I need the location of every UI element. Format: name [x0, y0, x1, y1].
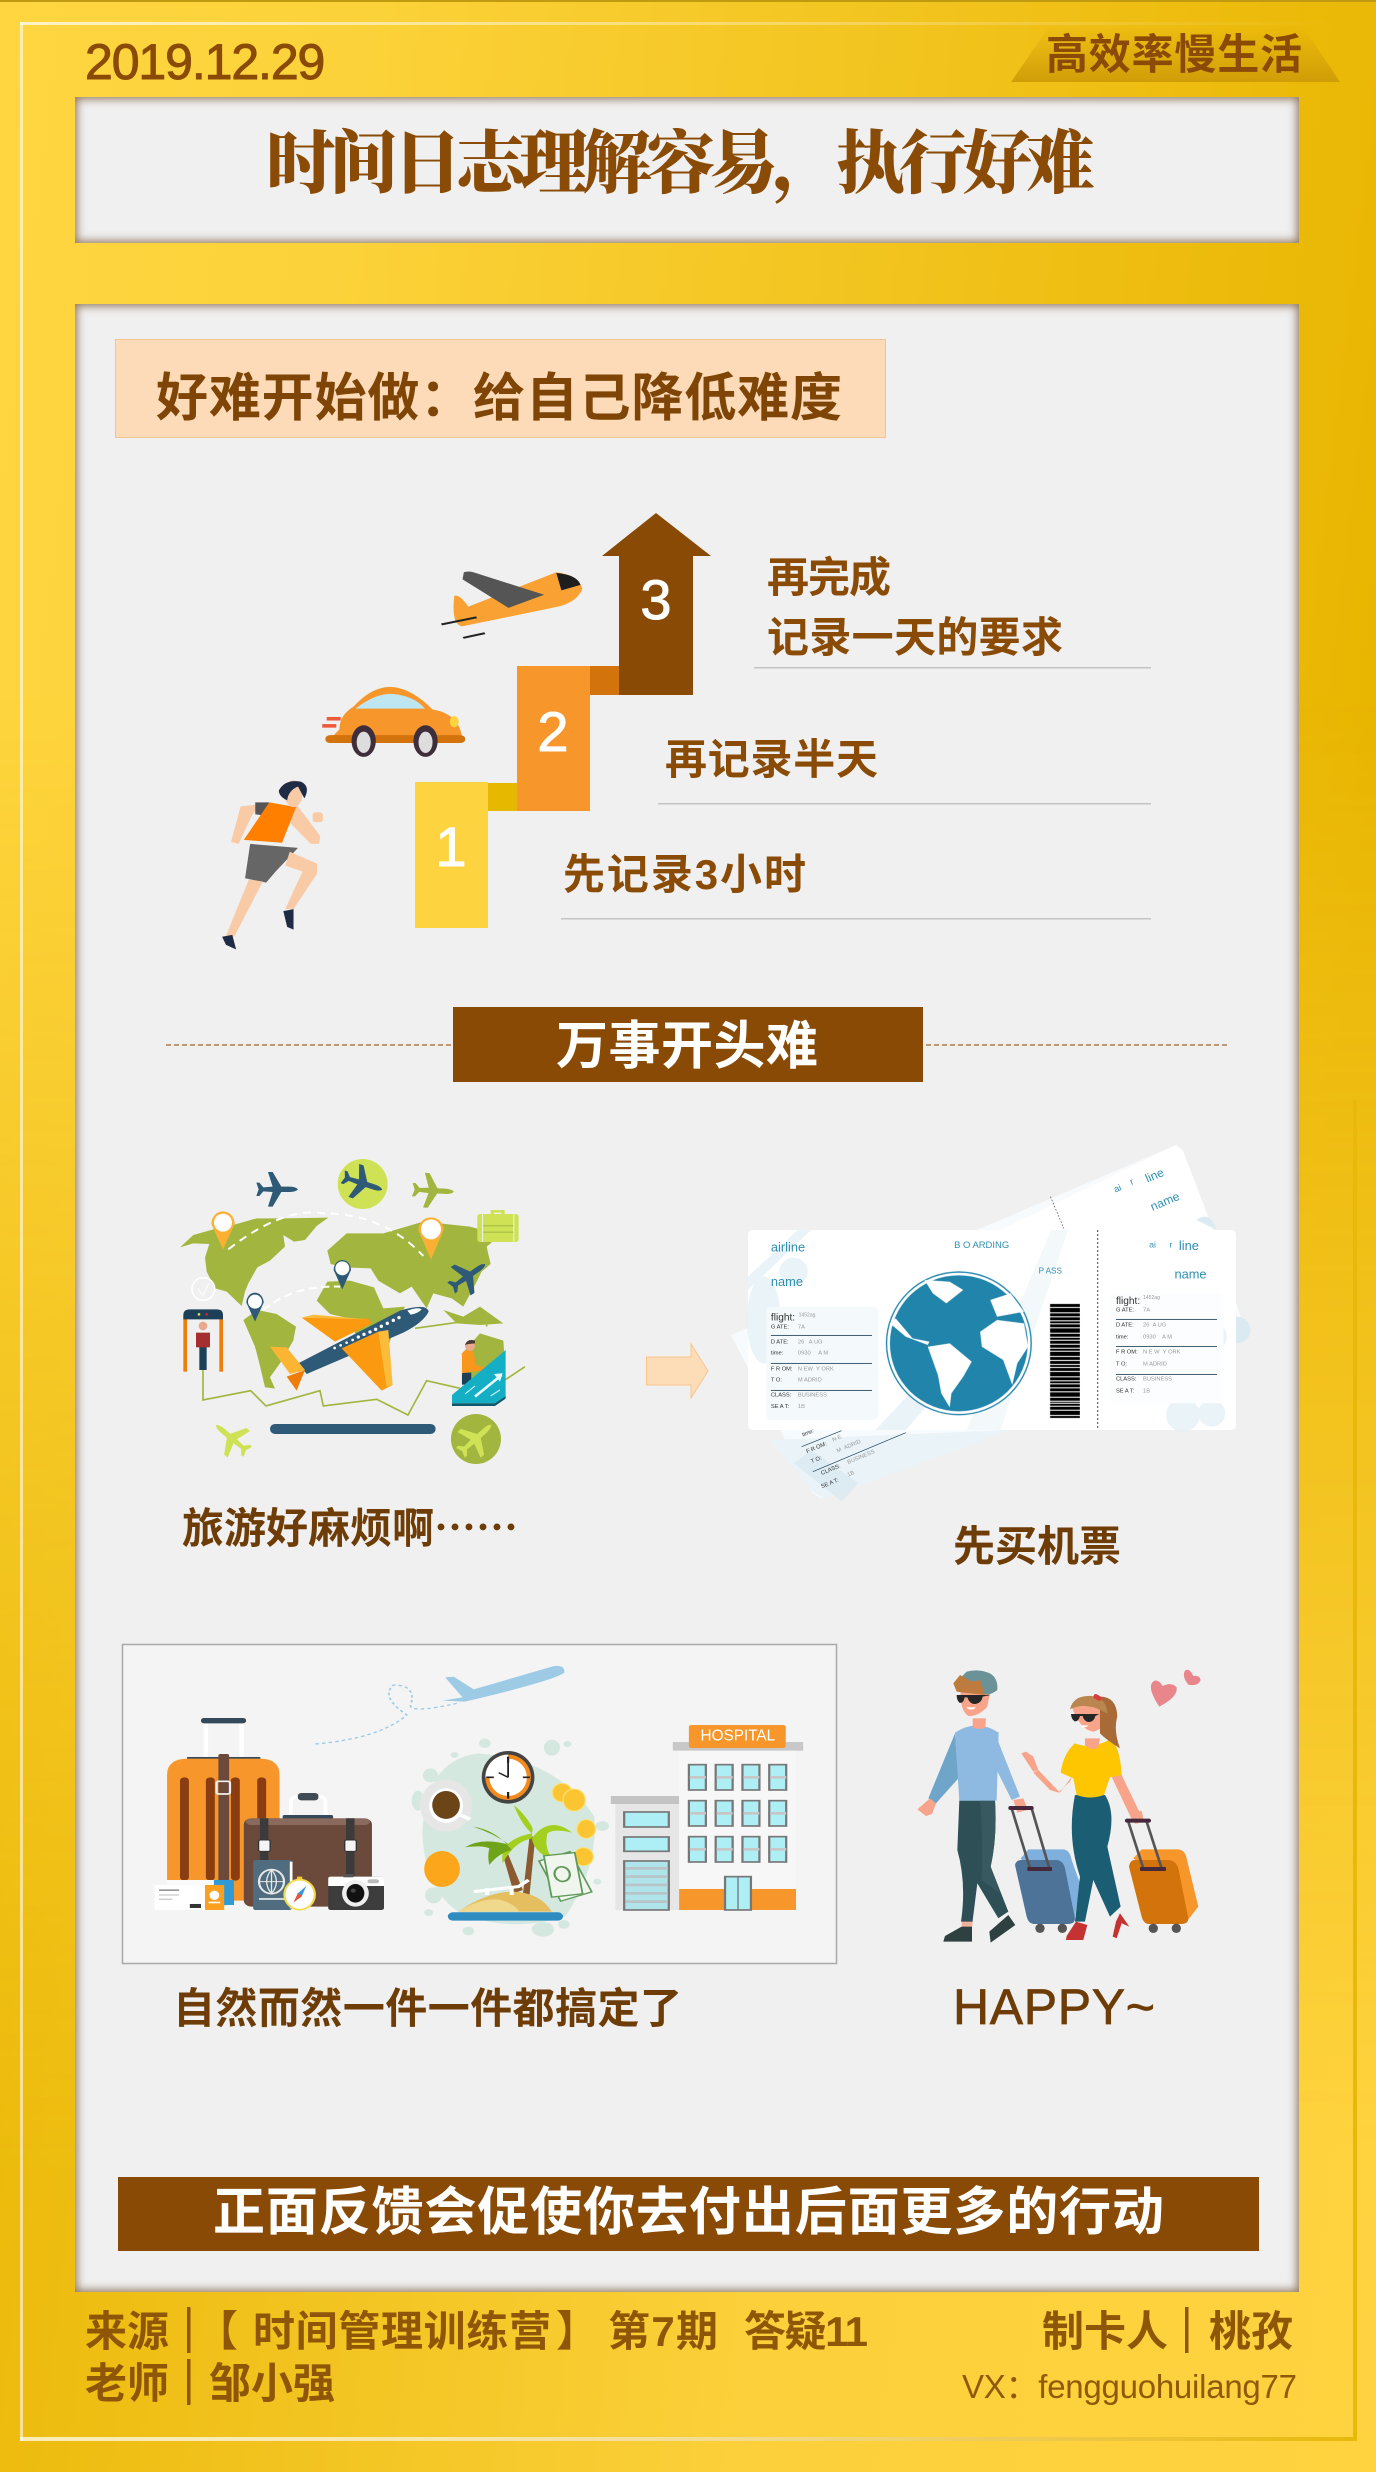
globe — [886, 1272, 1031, 1415]
divider banner: 万事开头难 — [556, 1018, 818, 1076]
illustration: boarding passes — [731, 1145, 1251, 1502]
ticket text left: P ASS — [1039, 1267, 1062, 1276]
ticket text lower rear: SE A T: — [820, 1477, 840, 1490]
big airplane — [270, 1307, 429, 1391]
footer: wechat id: VX：fengguohuilang77 — [962, 2368, 1297, 2405]
small planes and badges — [256, 1172, 298, 1207]
ticket text right stub: 26 A UG — [1143, 1322, 1166, 1328]
footer: card maker — [1042, 2307, 1293, 2355]
ticket text right stub: 1B — [1143, 1388, 1150, 1394]
ticket text lower rear: F R OM: — [805, 1441, 828, 1455]
ticket text left: flight: — [771, 1313, 795, 1324]
illustration: world map travel — [180, 1159, 525, 1466]
footer: teacher: 老师 — [85, 2360, 169, 2407]
zigzag route — [203, 1318, 525, 1415]
ticket text left: 1B — [798, 1404, 805, 1410]
security gate — [183, 1309, 223, 1372]
rear tickets: line — [1143, 1165, 1166, 1185]
footer: source: 【 — [196, 2308, 238, 2355]
ticket text left: name — [771, 1274, 803, 1289]
ticket text right stub: 1452ag — [1143, 1295, 1160, 1301]
staircase: step 1 — [415, 782, 517, 928]
icon: small airplane — [441, 571, 582, 638]
ticket text left: N EW Y ORK — [798, 1366, 834, 1372]
footer: teacher: 邹小强 — [209, 2360, 335, 2407]
ticket text left: time: — [771, 1350, 784, 1356]
ticket text right stub: 7A — [1143, 1307, 1150, 1313]
ticket text lower rear — [801, 1428, 906, 1490]
staircase: step 3 arrow: 3 — [640, 568, 672, 631]
blue suitcase — [1008, 1806, 1080, 1933]
footer: card maker: 制卡人 — [1042, 2308, 1168, 2355]
island, clock and money — [412, 1739, 609, 1937]
ticket text right stub: name — [1174, 1267, 1207, 1282]
ticket text right stub: N E W Y ORK — [1143, 1349, 1181, 1355]
map continents — [180, 1218, 505, 1389]
ticket text left: M ADRID — [798, 1377, 822, 1383]
footer: source: 答疑11 — [744, 2308, 868, 2355]
ticket text left: D ATE: — [771, 1339, 789, 1345]
footer: source: 时间管理训练营 — [253, 2308, 551, 2355]
hospital building: HOSPITAL — [700, 1728, 776, 1745]
illustration: preparations — [155, 1666, 803, 1937]
bottom takeaway banner: 正面反馈会促使你去付出后面更多的行动 — [213, 2184, 1164, 2242]
orange suitcase — [167, 1718, 280, 1901]
hospital building — [611, 1725, 803, 1910]
ticket text left: B O ARDING — [954, 1239, 1009, 1250]
step text 3: 记录一天的要求 — [767, 614, 1063, 661]
subheading box — [116, 340, 886, 438]
main ticket — [748, 1230, 1236, 1430]
ticket text left: F R OM: — [771, 1366, 793, 1372]
step text 1: 先记录3小时 — [563, 851, 806, 898]
footer: card maker: 桃孜 — [1209, 2308, 1293, 2355]
rear tickets: r — [1128, 1176, 1135, 1187]
panel: tasks illustration box — [122, 1644, 836, 1964]
ticket text right stub: M ADRID — [1143, 1361, 1167, 1367]
step text 3: 再完成 — [767, 554, 891, 601]
ticket text left: CLASS: — [771, 1392, 792, 1398]
woman — [1021, 1693, 1144, 1940]
ticket text right stub: time: — [1116, 1334, 1129, 1340]
caption: happy: HAPPY~ — [953, 1979, 1155, 2035]
ticket text left: T O: — [771, 1377, 782, 1383]
ticket text lower rear: 1B — [847, 1470, 856, 1478]
footer: teacher — [85, 2359, 335, 2407]
ticket text left: airline — [771, 1239, 805, 1254]
icon: runner — [222, 780, 323, 949]
ticket text lower rear: time: — [801, 1428, 816, 1438]
ticket text right stub: line — [1179, 1238, 1199, 1253]
panel: main content card — [75, 304, 1299, 2292]
illustration: happy couple with luggage — [917, 1670, 1201, 1943]
date: 2019.12.29 — [85, 34, 324, 90]
ticket text lower rear: T O: — [810, 1455, 823, 1465]
ticket text left: 7A — [798, 1324, 805, 1330]
rear tickets: ai — [1112, 1182, 1123, 1194]
ticket text right stub: 0930 A M — [1143, 1334, 1172, 1340]
location pins — [211, 1211, 444, 1322]
staircase: step 1: 1 — [435, 815, 467, 878]
ticket text right stub: ai — [1149, 1239, 1156, 1249]
ticket text right stub: G ATE: — [1116, 1307, 1134, 1313]
footer: source: 】 — [556, 2308, 598, 2355]
rear tickets: name — [1148, 1189, 1182, 1214]
rear tickets — [731, 1145, 1251, 1502]
icon: car — [322, 687, 465, 757]
tag: series name — [1011, 25, 1340, 82]
caption: buy tickets: 先买机票 — [953, 1523, 1121, 1570]
caption: travel trouble: 旅游好麻烦啊…… — [182, 1495, 518, 1556]
divider banner — [166, 1007, 1229, 1082]
footer: source: 来源 — [85, 2308, 169, 2355]
barcode — [1021, 1304, 1109, 1418]
panel: title card — [75, 97, 1299, 243]
hearts — [1151, 1670, 1201, 1707]
ticket text left: SE A T: — [771, 1404, 790, 1410]
ticket text right stub: r — [1169, 1239, 1172, 1249]
arrow: to tickets — [646, 1344, 708, 1398]
ticket text lower rear: CLASS: — [820, 1463, 842, 1477]
staircase: step 3 arrow — [602, 513, 711, 695]
ticket, passport, compass and camera — [155, 1860, 384, 1910]
ticket text lower rear: BUSINESS — [847, 1449, 876, 1466]
ticket text left: 0930 A M — [798, 1350, 828, 1356]
ticket text lower rear: M ADRID — [836, 1439, 862, 1454]
footer: source — [85, 2307, 868, 2355]
step text 2: 再记录半天 — [665, 736, 878, 783]
bottom takeaway banner — [118, 2177, 1259, 2251]
ticket text right stub: D ATE: — [1116, 1322, 1134, 1328]
ticket text right stub: BUSINESS — [1143, 1376, 1172, 1382]
ticket text left: BUSINESS — [798, 1392, 827, 1398]
ticket text right stub: F R OM: — [1116, 1349, 1138, 1355]
ticket text left: 26 A UG — [798, 1339, 822, 1345]
tag: series name: 高效率慢生活 — [1046, 31, 1302, 78]
staircase: step 2: 2 — [537, 700, 569, 763]
title: 时间日志理解容易，执行好难 — [266, 108, 1095, 207]
brown suitcase — [244, 1793, 372, 1907]
step text 3 — [754, 554, 1151, 668]
staircase: step 2 — [517, 666, 619, 811]
ticket text right stub: flight: — [1116, 1296, 1140, 1307]
check-in agent and desk — [452, 1340, 506, 1406]
subheading box: 好难开始做：给自己降低难度 — [156, 356, 842, 431]
caption: everything handled: 自然而然一件一件都搞定了 — [173, 1985, 682, 2032]
ticket text left: 1452ag — [799, 1312, 816, 1318]
blue plane and route — [315, 1666, 564, 1744]
ticket text lower rear: N E — [832, 1434, 843, 1443]
ticket text right stub — [1116, 1238, 1217, 1394]
orange suitcase — [1125, 1819, 1198, 1933]
footer: source: 第7期 — [608, 2308, 718, 2355]
ticket text left: G ATE: — [771, 1324, 789, 1330]
ticket text left — [771, 1239, 1062, 1410]
ticket text right stub: T O: — [1116, 1361, 1127, 1367]
man — [917, 1670, 1028, 1943]
ticket text right stub: CLASS: — [1116, 1376, 1137, 1382]
luggage icon — [477, 1210, 519, 1242]
ticket text right stub: SE A T: — [1116, 1388, 1135, 1394]
